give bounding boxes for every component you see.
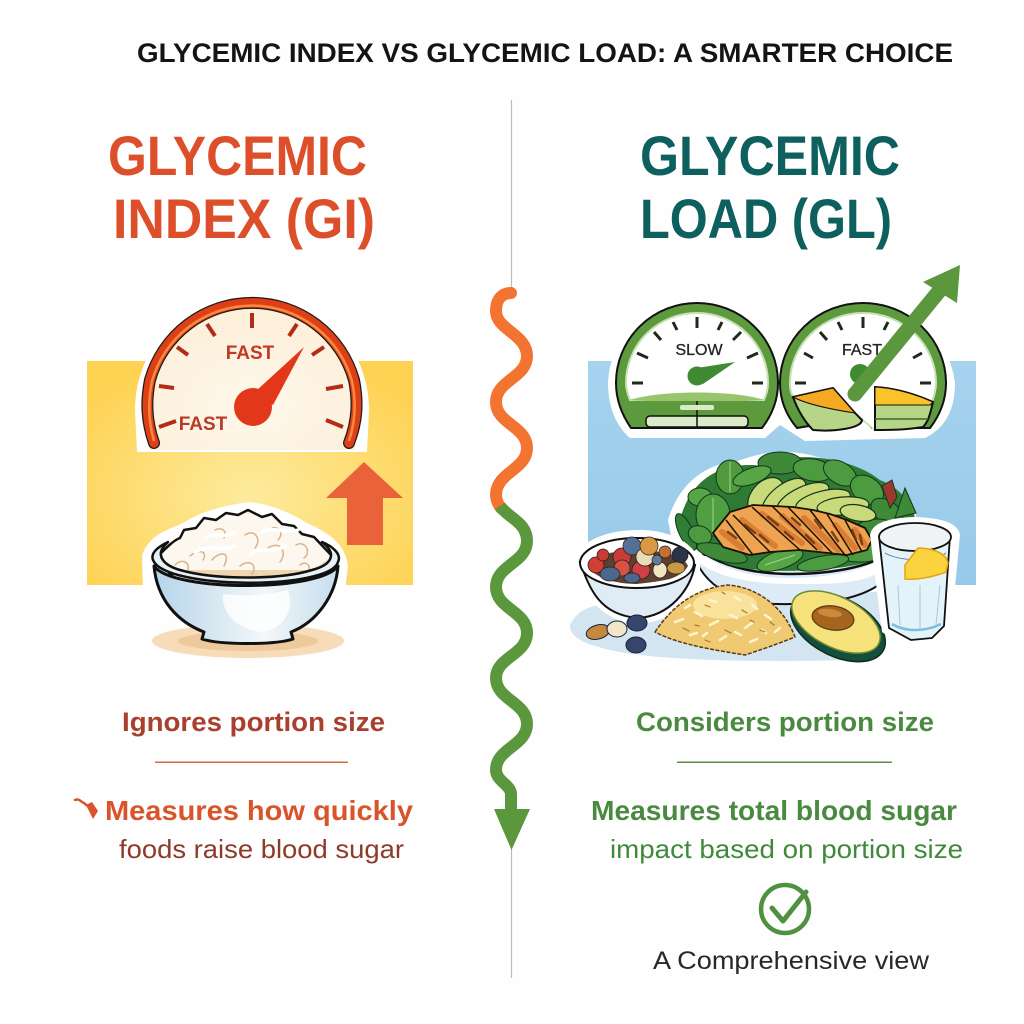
glass of water with lemon <box>870 517 960 648</box>
gauges <box>608 265 960 441</box>
gauge: fast with orange wedges <box>780 303 946 431</box>
salad bowl <box>668 452 925 604</box>
upward green arrow <box>855 265 960 394</box>
avocado half <box>779 578 897 676</box>
wavy arrow: orange to green <box>494 293 530 850</box>
left text: measures how quickly <box>105 795 413 864</box>
bowl of white rice <box>142 502 348 658</box>
gauge: fast: FAST <box>179 414 228 435</box>
gauge: slow: SLOW <box>675 342 723 359</box>
food plate illustration <box>570 452 960 676</box>
salad leaves <box>680 457 915 571</box>
heading: glycemic index <box>108 124 375 250</box>
right divider <box>677 762 892 763</box>
avocado slices <box>740 471 877 524</box>
caption: a comprehensive view: A Comprehensive view <box>653 947 930 975</box>
loose nuts and berries <box>585 615 647 653</box>
heading: glycemic load <box>640 124 900 250</box>
gauge: fast with orange wedges: FAST <box>842 342 882 359</box>
left text: measures how quickly: Measures how quickly <box>105 795 413 826</box>
yellow background panel <box>87 361 413 585</box>
needle <box>234 347 304 426</box>
panel: glycemic load illustration <box>570 265 976 676</box>
icon: small orange dropper <box>75 799 98 819</box>
small bowl of berries and nuts <box>574 530 700 624</box>
heading: glycemic load: LOAD (GL) <box>640 187 892 250</box>
left text: ignores portion size: Ignores portion size <box>122 707 385 737</box>
grilled chicken slices <box>713 505 872 555</box>
left text: measures how quickly: foods raise blood sugar <box>119 834 404 864</box>
right text: measures total blood sugar <box>591 795 963 864</box>
rice pile <box>655 585 795 655</box>
heading: glycemic index: INDEX (GI) <box>113 187 375 250</box>
icon: check mark circle <box>761 885 809 933</box>
heading: glycemic load: GLYCEMIC <box>640 124 900 187</box>
blue background panel <box>588 361 976 585</box>
white halo behind gauges <box>608 297 955 441</box>
gauge: fast: FAST <box>226 343 275 364</box>
up arrow <box>326 462 403 545</box>
right text: considers portion size: Considers portion size <box>636 707 934 737</box>
gauge: slow <box>616 303 778 428</box>
title: GLYCEMIC INDEX VS GLYCEMIC LOAD: A SMARTER CHOICE <box>137 38 953 68</box>
right text: measures total blood sugar: Measures total blood sugar <box>591 795 957 826</box>
table shadow <box>570 590 892 661</box>
panel: glycemic index illustration <box>87 292 413 658</box>
right text: measures total blood sugar: impact based on portion size <box>610 834 963 864</box>
center divider line <box>510 100 512 978</box>
heading: glycemic index: GLYCEMIC <box>108 124 367 187</box>
left divider <box>155 762 348 763</box>
gauge: fast <box>135 292 369 452</box>
